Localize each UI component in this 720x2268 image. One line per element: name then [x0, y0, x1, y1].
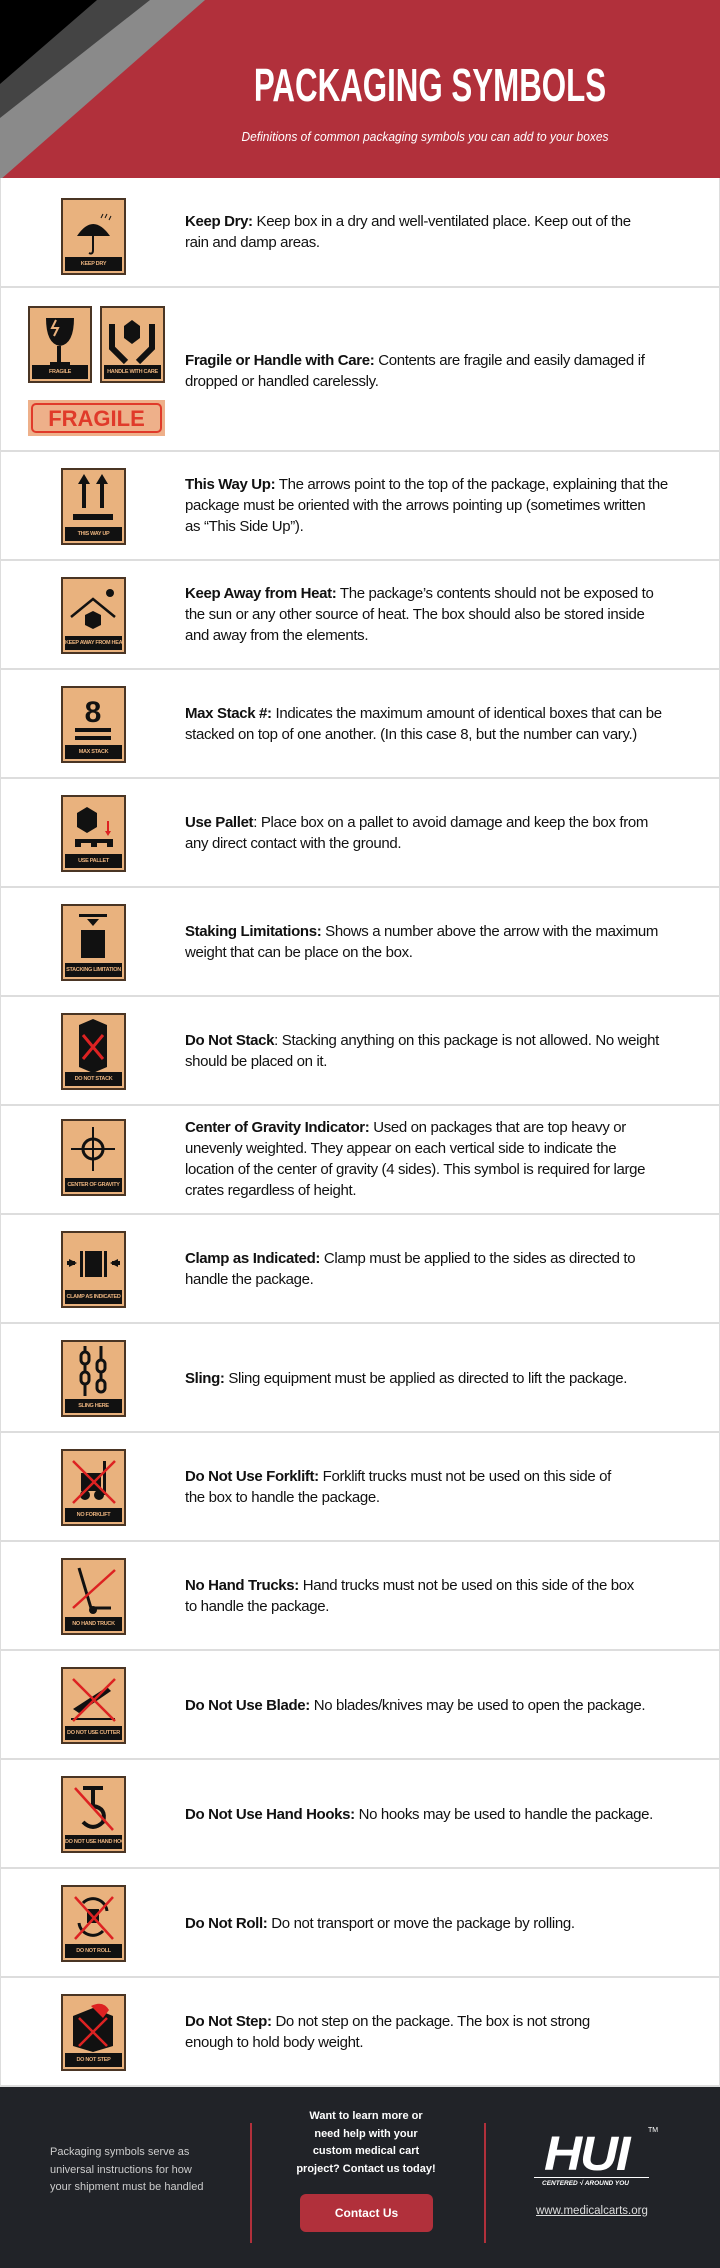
icon: do not stack: DO NOT STACK	[75, 1076, 112, 1082]
text: clamp	[185, 1250, 635, 1288]
text: sling: Sling: Sling equipment must be applied as directed to lift the package.	[185, 1370, 627, 1387]
text: hand trucks: No Hand Trucks: Hand trucks must not be used on this side of the box	[185, 1577, 634, 1594]
icon: do not step	[61, 1994, 126, 2071]
row: step	[0, 1978, 720, 2087]
logo: HUI: CENTERED √ AROUND YOU	[542, 2180, 629, 2187]
text: heat	[185, 585, 654, 644]
text: staking: Staking Limitations: Shows a number above the arrow with the maximum	[185, 923, 658, 940]
text: this way up: package must be oriented with the arrows pointing up (sometimes written	[185, 497, 645, 514]
text: keep dry	[185, 213, 631, 251]
text: forklift: Do Not Use Forklift: Forklift trucks must not be used on this side of	[185, 1468, 611, 1485]
button: contact us	[300, 2194, 433, 2232]
text: center of gravity: Center of Gravity Indicator: Used on packages that are top heavy or	[185, 1119, 626, 1136]
icon: keep dry: KEEP DRY	[81, 261, 106, 267]
row: hooks	[0, 1760, 720, 1869]
icon: do not stack	[61, 1013, 126, 1090]
text: blade: Do Not Use Blade: No blades/knives may be used to open the package.	[185, 1697, 645, 1714]
row: use pallet	[0, 779, 720, 888]
icons: fragile	[28, 306, 165, 436]
text: keep dry: Keep Dry: Keep box in a dry and well-ventilated place. Keep out of the	[185, 213, 631, 230]
row: do not stack	[0, 997, 720, 1106]
footer cta text: Want to learn more or	[309, 2110, 423, 2122]
text: center of gravity: crates regardless of height.	[185, 1182, 356, 1199]
row: max stack	[0, 670, 720, 779]
icon: max stack: MAX STACK	[79, 749, 108, 755]
row: blade	[0, 1651, 720, 1760]
text: use pallet: Use Pallet: Place box on a pallet to avoid damage and keep the box from	[185, 814, 648, 831]
icon: stacking limitation: STACKING LIMITATION	[66, 967, 121, 973]
text: use pallet	[185, 814, 648, 852]
header	[0, 0, 720, 178]
text: step	[185, 2013, 590, 2051]
text: heat: and away from the elements.	[185, 627, 368, 644]
text: clamp: Clamp as Indicated: Clamp must be applied to the sides as directed to	[185, 1250, 635, 1267]
text: heat: Keep Away from Heat: The package’s contents should not be exposed to	[185, 585, 653, 602]
row: roll	[0, 1869, 720, 1978]
text: center of gravity: unevenly weighted. They appear on each vertical side to indicate the	[185, 1140, 616, 1157]
row: staking limitations	[0, 888, 720, 997]
text: staking: weight that can be place on the box.	[185, 944, 413, 961]
icon: do not use cutter	[61, 1667, 126, 1744]
icon: do not roll	[61, 1885, 126, 1962]
text: do not stack	[185, 1032, 660, 1070]
footer cta text: need help with your	[314, 2128, 418, 2140]
row: keep dry	[0, 178, 720, 288]
icon: use pallet	[61, 795, 126, 872]
row: fragile	[0, 288, 720, 452]
icon: keep away from heat	[61, 577, 126, 654]
text: max stack: stacked on top of one another. (In this case 8, but the number can vary.)	[185, 726, 637, 743]
text: this way up	[185, 476, 668, 535]
footer cta text: custom medical cart	[313, 2145, 419, 2157]
row: forklift	[0, 1433, 720, 1542]
text: center of gravity: location of the center of gravity (4 sides). This symbol is required for large	[185, 1161, 645, 1178]
row: center of gravity	[0, 1106, 720, 1215]
logo: HUI: HUI	[544, 2128, 628, 2181]
text: heat: the sun or any other source of heat. The box should also be stored inside	[185, 606, 644, 623]
icon: use pallet: USE PALLET	[78, 858, 109, 864]
icons: fragile: FRAGILE	[48, 406, 145, 431]
icon: max stack	[61, 686, 126, 763]
row: this way up	[0, 452, 720, 561]
icon: do not use cutter: DO NOT USE CUTTER	[67, 1730, 120, 1736]
text: use pallet: any direct contact with the ground.	[185, 835, 401, 852]
text: fragile	[185, 352, 645, 390]
icon: clamp	[61, 1231, 126, 1308]
icon: sling	[61, 1340, 126, 1417]
text: max stack: Max Stack #: Indicates the maximum amount of identical boxes that can be	[185, 705, 662, 722]
icon: no hand truck	[61, 1558, 126, 1635]
footer text: left: Packaging symbols serve as	[50, 2146, 189, 2158]
icons: fragile: HANDLE WITH CARE	[107, 369, 158, 375]
text: do not stack: should be placed on it.	[185, 1053, 327, 1070]
divider right	[484, 2123, 486, 2243]
icon: no hand truck: NO HAND TRUCK	[72, 1621, 115, 1627]
icon: this way up: THIS WAY UP	[78, 531, 109, 537]
text: roll: Do Not Roll: Do not transport or move the package by rolling.	[185, 1915, 575, 1932]
icon: do not roll: DO NOT ROLL	[76, 1948, 111, 1954]
text: step: enough to hold body weight.	[185, 2034, 363, 2051]
row: clamp	[0, 1215, 720, 1324]
text: step: Do Not Step: Do not step on the package. The box is not strong	[185, 2013, 590, 2030]
text: fragile: dropped or handled carelessly.	[185, 373, 379, 390]
text: hand trucks: to handle the package.	[185, 1598, 329, 1615]
text: this way up: as “This Side Up”).	[185, 518, 303, 535]
title: PACKAGING SYMBOLS	[254, 59, 606, 111]
text: forklift	[185, 1468, 612, 1506]
footer text: left: universal instructions for how	[50, 2164, 192, 2176]
link: website: www.medicalcarts.org	[536, 2205, 648, 2217]
subtitle: Definitions of common packaging symbols you can add to your boxes	[242, 129, 608, 144]
footer cta text: project? Contact us today!	[296, 2162, 436, 2174]
text: fragile: Fragile or Handle with Care: Contents are fragile and easily damaged if	[185, 352, 645, 369]
row: heat	[0, 561, 720, 670]
icon: no forklift	[61, 1449, 126, 1526]
text: clamp: handle the package.	[185, 1271, 313, 1288]
icon: keep dry	[61, 198, 126, 275]
footer cta text	[296, 2110, 436, 2174]
footer text: left: your shipment must be handled	[50, 2181, 203, 2193]
text: forklift: the box to handle the package.	[185, 1489, 380, 1506]
icon: do not step: DO NOT STEP	[76, 2057, 110, 2063]
text: center of gravity	[185, 1119, 645, 1199]
icons: fragile: FRAGILE	[49, 369, 71, 375]
icon: no forklift: NO FORKLIFT	[77, 1512, 110, 1518]
icon: this way up	[61, 468, 126, 545]
footer: TM	[648, 2127, 658, 2134]
icon: no hand hooks	[61, 1776, 126, 1853]
logo: HUI	[534, 2127, 658, 2187]
text: do not stack: Do Not Stack: Stacking anything on this package is not allowed. No weight	[185, 1032, 659, 1049]
icon: max stack: 8	[85, 696, 101, 729]
text: this way up: This Way Up: The arrows point to the top of the package, explaining that the	[185, 476, 668, 493]
text: hand trucks	[185, 1577, 634, 1615]
icon: stacking limitation	[61, 904, 126, 981]
footer text: left	[50, 2146, 203, 2193]
row: sling	[0, 1324, 720, 1433]
footer	[0, 2087, 720, 2268]
row: hand trucks	[0, 1542, 720, 1651]
icon: center of gravity	[61, 1119, 126, 1196]
text: hooks: Do Not Use Hand Hooks: No hooks may be used to handle the package.	[185, 1806, 653, 1823]
icon: clamp: CLAMP AS INDICATED	[66, 1294, 121, 1300]
text: max stack	[185, 705, 662, 743]
icon: center of gravity: CENTER OF GRAVITY	[67, 1182, 120, 1188]
text: staking	[185, 923, 658, 961]
icon: sling: SLING HERE	[78, 1403, 109, 1409]
button: contact us: Contact Us	[335, 2206, 398, 2220]
text: keep dry: rain and damp areas.	[185, 234, 320, 251]
divider left	[250, 2123, 252, 2243]
